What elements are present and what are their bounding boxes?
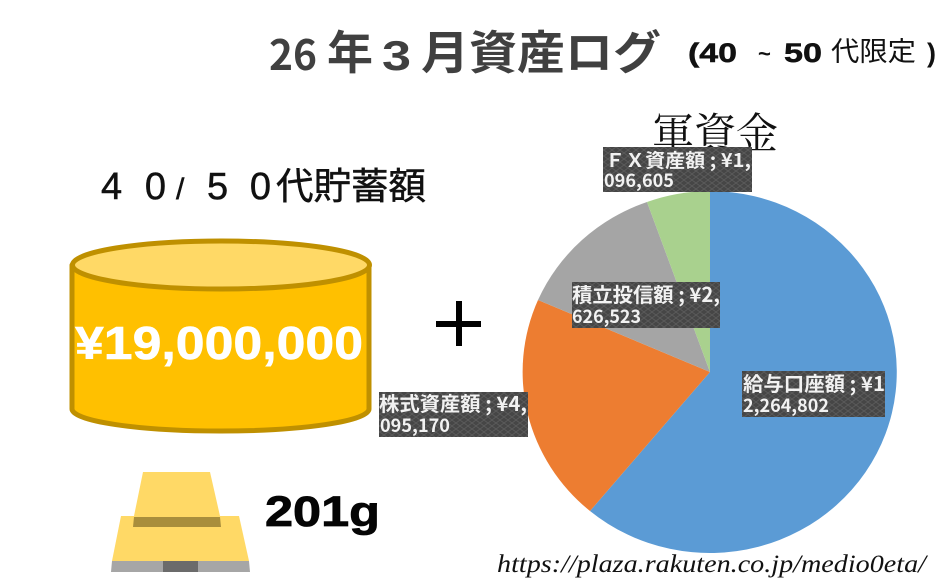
label: investment trust: 626,523 — [572, 303, 641, 329]
gold weight: 201g — [265, 488, 380, 536]
label: FX — [603, 146, 752, 193]
pie chart — [523, 191, 897, 553]
icon: plus sign — [436, 301, 481, 346]
title: 月資産ログ — [421, 17, 661, 83]
icon: savings cylinder — [72, 241, 370, 431]
source URL: https://plaza.rakuten.co.jp/medio0eta/ — [497, 551, 928, 578]
title: 3 — [382, 32, 411, 79]
label: FX: 096,605 — [604, 167, 674, 193]
label: salary account: 給与口座額 ; ¥1 — [743, 368, 885, 397]
slice: stocks — [523, 300, 710, 511]
label: salary account — [742, 368, 885, 418]
label: FX: ＦＸ資産額 ; ¥1, — [605, 146, 751, 173]
heading: savings: / — [176, 173, 185, 206]
savings amount: ¥19,000,000 — [75, 317, 363, 369]
slice: FX — [647, 191, 710, 372]
heading: savings: 代貯蓄額 — [276, 156, 426, 210]
subtitle — [688, 30, 936, 69]
heading: savings: 50 — [207, 166, 271, 208]
subtitle: 代限定 — [831, 30, 916, 69]
subtitle: (40 — [688, 38, 737, 68]
heading: savings: 40 — [101, 166, 166, 208]
title: 年 — [327, 17, 373, 83]
title — [269, 17, 661, 83]
label: stocks: 095,170 — [380, 412, 450, 438]
label: stocks — [379, 388, 528, 438]
label: stocks: 株式資産額 ; ¥4, — [379, 388, 527, 417]
slice: salary account — [590, 191, 897, 553]
slice: investment trust — [538, 202, 710, 372]
label: investment trust: 積立投信額 ; ¥2, — [572, 279, 720, 308]
subtitle: ) — [927, 38, 936, 68]
icon: gold bars — [111, 472, 250, 572]
subtitle: ~ — [758, 41, 771, 66]
label: investment trust — [572, 279, 720, 329]
title: 26 — [269, 22, 317, 83]
pie chart heading: 軍資金 — [652, 101, 778, 161]
label: salary account: 2,264,802 — [743, 392, 829, 418]
subtitle: 50 — [784, 38, 822, 68]
heading: savings — [101, 156, 426, 210]
